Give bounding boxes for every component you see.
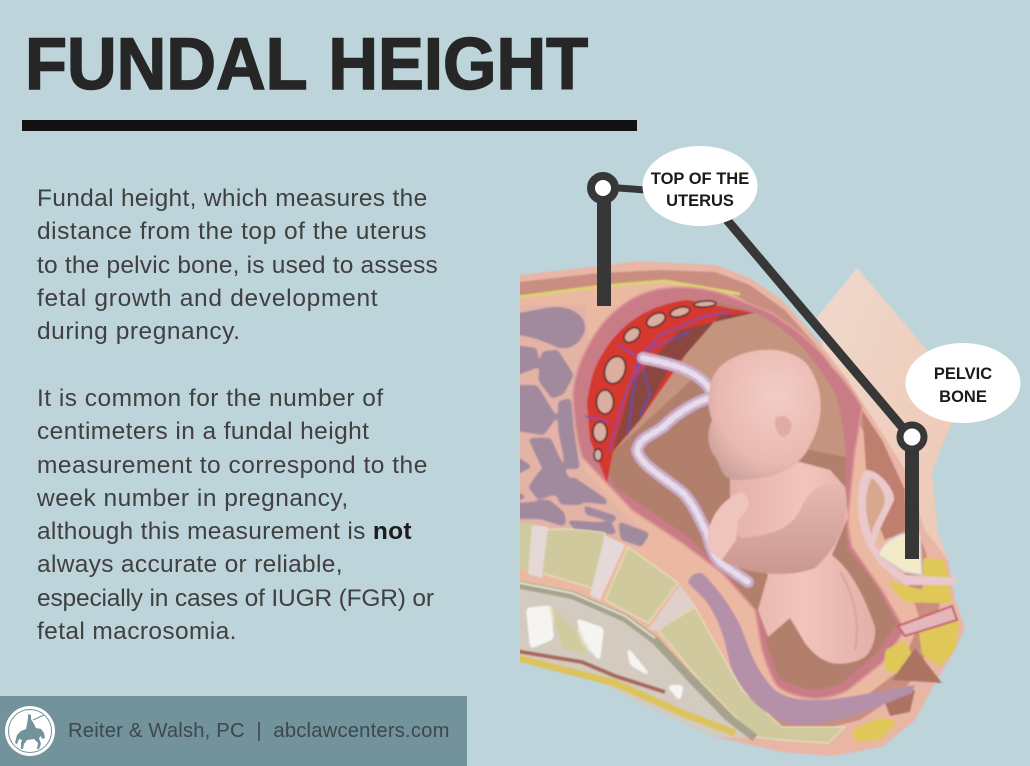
fetus body and leg <box>730 462 875 664</box>
illustration: rear uterine surface <box>613 313 846 457</box>
anatomy illustration with pointers <box>520 146 1020 756</box>
illustration: amniotic cavity <box>587 300 897 689</box>
fetus leg fold <box>840 572 857 650</box>
text block: accuracy note <box>37 385 434 645</box>
footer bar <box>0 696 467 766</box>
callout: pelvic bone: PELVIC <box>934 365 992 383</box>
text block: accuracy note: It is common for the number of <box>37 385 384 412</box>
connective tissue backing <box>524 308 634 536</box>
callout: pelvic bone: BONE <box>939 388 987 406</box>
text block: definition <box>37 185 438 345</box>
fetus hand <box>707 492 748 560</box>
callout: pelvic bone <box>906 343 1020 423</box>
callout: top of the uterus <box>642 146 758 226</box>
illustration: pelvic organs and fat <box>852 470 960 742</box>
lower back structures <box>520 588 748 738</box>
pointer: top of the uterus <box>591 176 908 434</box>
callout: top of the uterus: UTERUS <box>666 192 734 210</box>
illustration: rectum <box>688 573 915 725</box>
illustration: umbilical cord <box>637 358 748 582</box>
intervertebral discs <box>528 525 548 578</box>
text block: accuracy note: week number in pregnancy, <box>37 485 349 512</box>
illustration: intestines <box>520 306 650 547</box>
body outline <box>510 261 965 756</box>
vertebrae <box>520 522 535 570</box>
title underline <box>22 120 637 131</box>
fetus head <box>708 350 821 480</box>
illustration: anatomy section <box>500 261 965 756</box>
fetus arm <box>721 488 847 574</box>
text block: definition: to the pelvic bone, is used to assess <box>37 252 438 278</box>
text block: accuracy note: although this measurement is not <box>37 518 412 545</box>
subcutaneous fat <box>510 282 920 718</box>
footer text: Reiter & Walsh, PC | abclawcenters.com <box>68 720 450 742</box>
text block: definition: distance from the top of the uterus <box>37 218 427 245</box>
illustration: uterus wall <box>573 287 905 699</box>
text block: definition: Fundal height, which measures the <box>37 185 428 212</box>
illustration: fetus <box>707 350 875 664</box>
text block: accuracy note: measurement to correspond to the <box>37 452 428 478</box>
illustration: abdominal section <box>510 261 965 756</box>
illustration: spine <box>510 522 845 743</box>
icon: horse and rider logo <box>5 706 55 756</box>
text block: definition: during pregnancy. <box>37 318 240 345</box>
text block: accuracy note: fetal macrosomia. <box>37 618 237 645</box>
title: FUNDAL HEIGHT <box>25 24 588 105</box>
pointer: pelvic bone <box>900 425 924 559</box>
illustration: placenta <box>585 300 755 483</box>
spinal canal <box>510 583 755 738</box>
text block: definition: fetal growth and development <box>37 285 378 312</box>
rust abdominal wall near pelvis <box>862 410 905 540</box>
text block: accuracy note: especially in cases of IUGR (FGR) or <box>37 584 434 612</box>
bowel loops <box>520 306 649 546</box>
muscle layer <box>510 270 940 735</box>
text block: accuracy note: centimeters in a fundal height <box>37 418 369 445</box>
illustration: maternal thigh skin <box>816 268 952 560</box>
text block: accuracy note: always accurate or reliable, <box>37 551 343 578</box>
fetus ear <box>775 416 791 437</box>
yellow fat strip <box>510 281 740 298</box>
callout: top of the uterus: TOP OF THE <box>651 170 749 188</box>
